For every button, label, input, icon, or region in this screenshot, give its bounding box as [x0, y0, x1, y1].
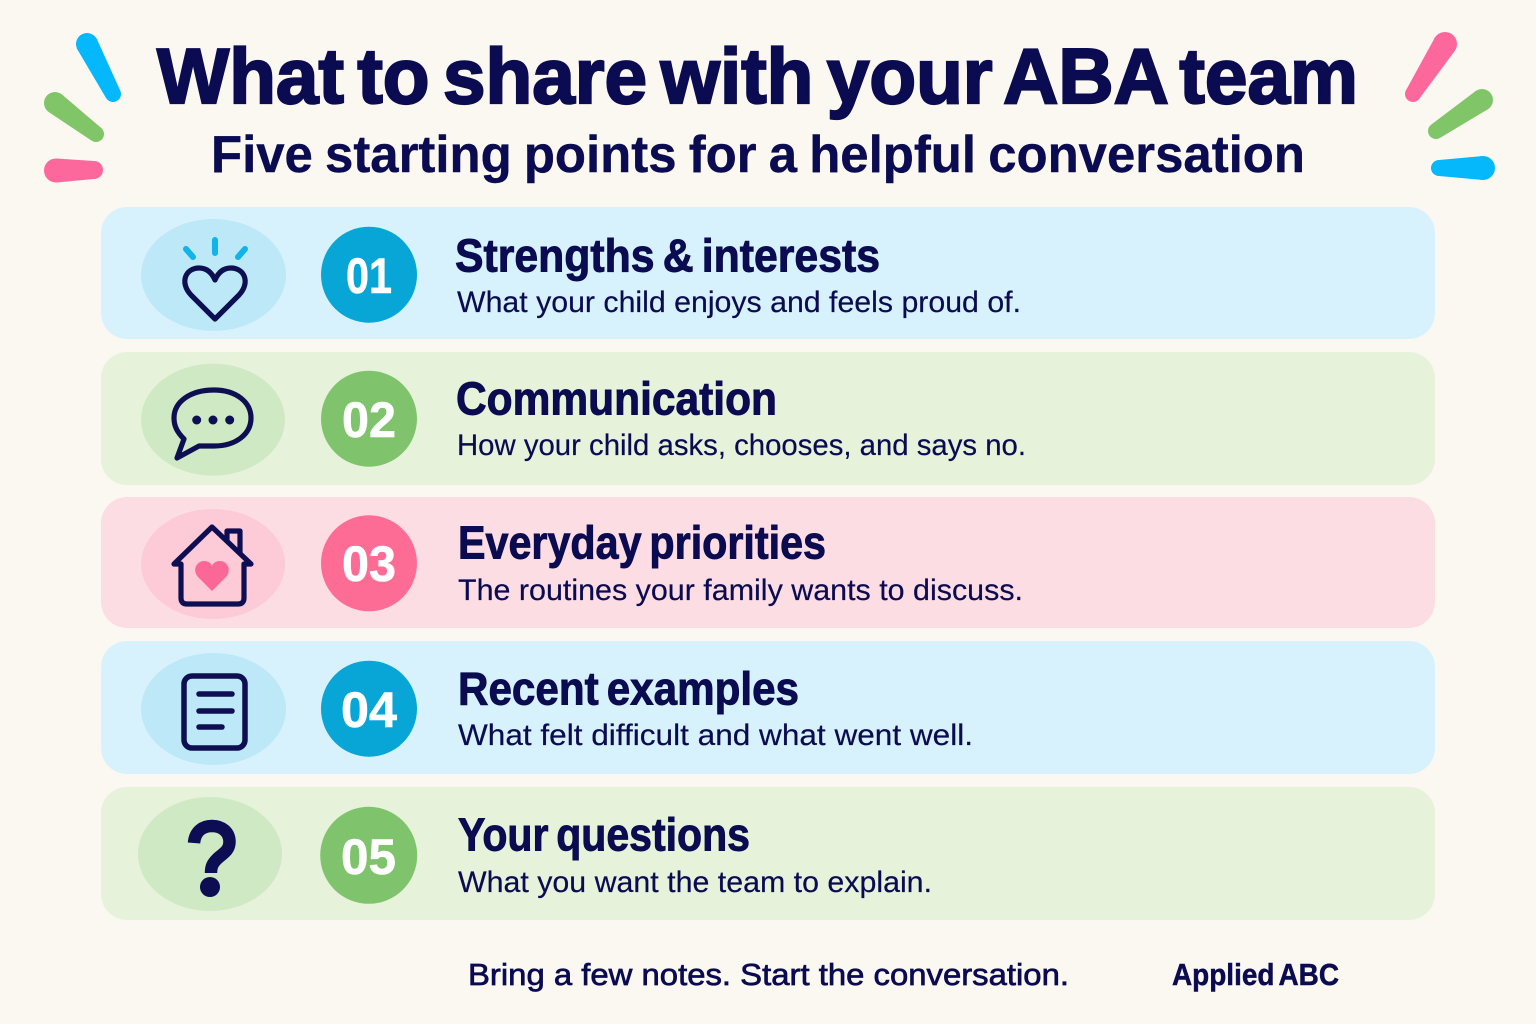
description: What felt difficult and what went well. [458, 719, 973, 752]
description: What your child enjoys and feels proud of. [457, 286, 1021, 319]
number badge 04: 04 [341, 682, 397, 738]
number badge 02 [321, 371, 417, 467]
decorative accent: left burst [44, 33, 121, 182]
heading: Strengths & interests [455, 230, 880, 282]
heading: Recent examples [458, 662, 799, 714]
subtitle: Five starting points for a helpful conversation [211, 126, 1305, 184]
number badge 05 [320, 807, 417, 904]
icon: question mark [138, 797, 282, 911]
heading: Everyday priorities [458, 516, 826, 568]
icon: heart with rays [141, 219, 286, 331]
icon: house with heart [141, 509, 285, 619]
panel: recent examples [101, 641, 1435, 774]
description: The routines your family wants to discuss. [458, 574, 1023, 607]
panel: everyday priorities [101, 497, 1435, 628]
footer tagline: Bring a few notes. Start the conversation. [468, 957, 1069, 992]
panel: strengths and interests [101, 207, 1435, 339]
number badge 01 [321, 227, 417, 323]
heading: Communication [456, 372, 777, 424]
number badge 02: 02 [342, 392, 396, 448]
icon: document [141, 653, 286, 765]
icon: speech bubble [141, 364, 285, 476]
panel: communication [101, 352, 1435, 485]
number badge 05: 05 [341, 829, 396, 885]
decorative accent: right burst [1405, 32, 1495, 180]
description: How your child asks, chooses, and says no. [457, 429, 1026, 462]
brand name: Applied ABC [1172, 957, 1339, 992]
number badge 03: 03 [342, 536, 396, 592]
title: What to share with your ABA team [157, 32, 1358, 120]
description: What you want the team to explain. [458, 866, 932, 899]
number badge 04 [321, 661, 417, 757]
panel: your questions [101, 787, 1435, 920]
number badge 03 [321, 515, 417, 611]
heading: Your questions [458, 808, 750, 860]
number badge 01: 01 [346, 248, 392, 304]
